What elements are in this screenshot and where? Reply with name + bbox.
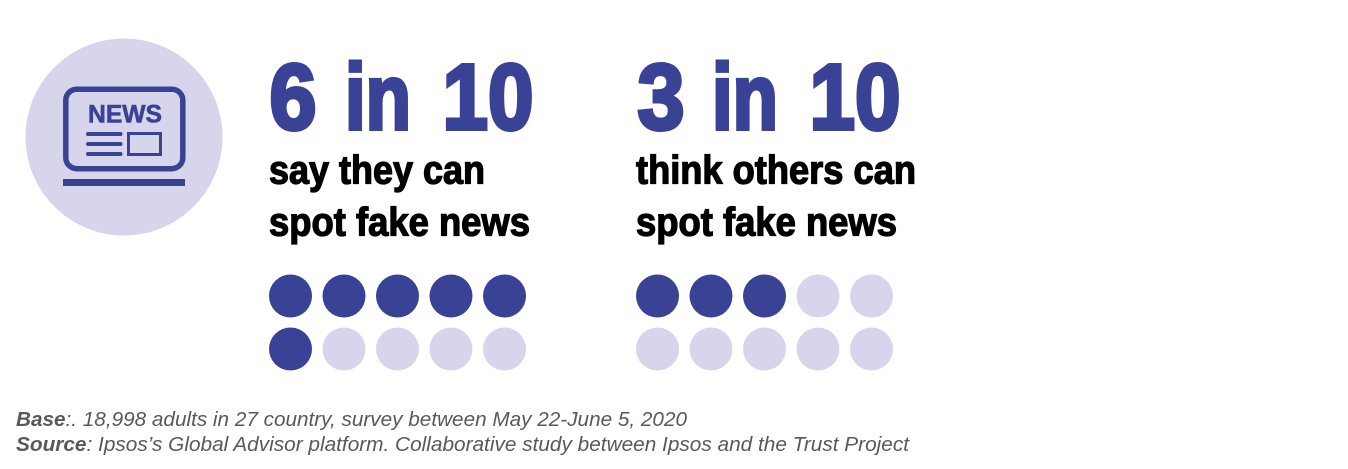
heading: 6 in 10: in xyxy=(345,45,411,149)
text: think others can spot fake news: think others can xyxy=(636,148,916,192)
text: say they can spot fake news xyxy=(269,148,530,244)
text: think others can spot fake news: spot fake news xyxy=(636,200,897,244)
heading: 6 in 10: 10 xyxy=(442,45,534,149)
icon: news monitor in circle xyxy=(26,38,222,236)
heading: 3 in 10: 10 xyxy=(810,45,900,149)
heading: 3 in 10: 3 xyxy=(638,45,684,149)
text: think others can spot fake news xyxy=(636,148,916,244)
heading: 6 in 10 xyxy=(270,45,534,149)
heading: 6 in 10: 6 xyxy=(270,45,316,149)
icon: news monitor in circle: NEWS xyxy=(88,100,162,128)
text: say they can spot fake news: spot fake news xyxy=(269,200,530,244)
footnote: base and source: Source: Ipsos’s Global Advisor platform. Collaborative study between Ipsos and the Trust Project xyxy=(16,434,910,456)
heading: 3 in 10 xyxy=(638,45,900,149)
dot chart: 3 of 10 filled xyxy=(636,274,893,370)
footnote: base and source: Base:. 18,998 adults in 27 country, survey between May 22-June 5, 2020 xyxy=(16,409,687,431)
panel: 3 in 10 xyxy=(636,45,916,370)
text: say they can spot fake news: say they can xyxy=(269,148,485,192)
dot chart: 6 of 10 filled xyxy=(269,274,526,370)
footnote: base and source xyxy=(16,409,910,456)
heading: 3 in 10: in xyxy=(712,45,778,149)
panel: 6 in 10 xyxy=(269,45,534,370)
